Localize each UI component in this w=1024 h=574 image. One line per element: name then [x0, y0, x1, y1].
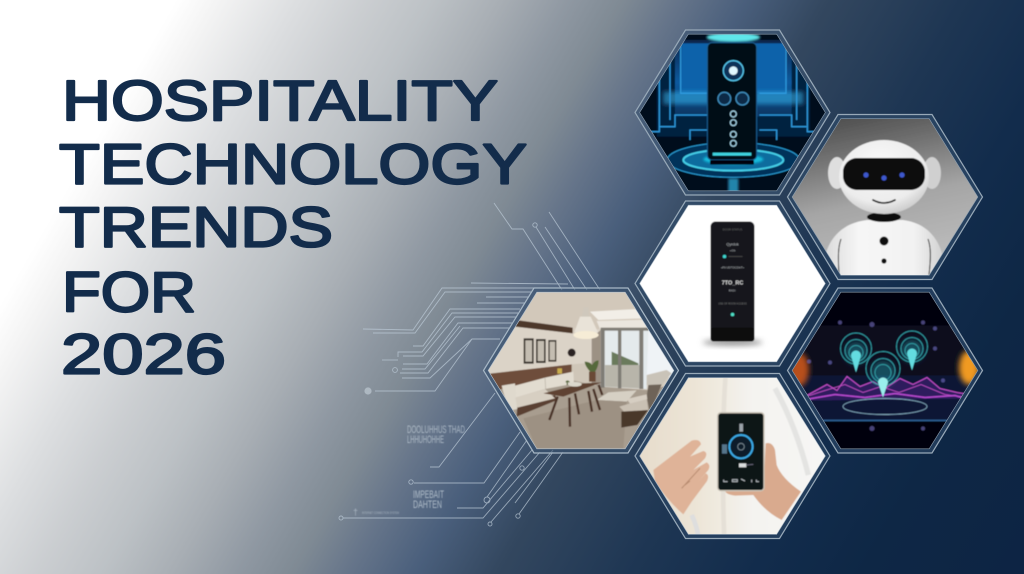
circuit node [364, 387, 372, 395]
title: TRENDS [59, 196, 333, 258]
panel: smart speaker hexagon [634, 29, 831, 196]
panel: hands holding phone hexagon [635, 374, 830, 540]
title: 2026 [61, 322, 226, 386]
title [59, 69, 527, 386]
title: HOSPITALITY [62, 69, 498, 132]
small caption with marker: † [353, 507, 358, 517]
small label: upper: LHHUHOHHE [407, 434, 444, 446]
small label: upper [407, 424, 465, 446]
panel: smartphone on white hexagon: 7TO_RC [722, 280, 743, 286]
panel: smartphone on white hexagon: DOOR STATUS [723, 228, 743, 232]
small label: lower: DAHTEN [413, 499, 442, 511]
panel: smartphone on white hexagon: Qyrdok [726, 242, 739, 246]
panel: robot hexagon [788, 114, 982, 280]
panel: smartphone on white hexagon [635, 201, 830, 366]
circuit lines [339, 203, 600, 526]
title: FOR [62, 260, 196, 324]
panel: smartphone on white hexagon: +Pli UDTOCDHT+ [721, 266, 745, 270]
panel: holographic wifi pins hexagon [788, 288, 982, 453]
small label: lower [413, 489, 444, 511]
panel: hotel room hexagon [480, 285, 680, 455]
small caption with marker [353, 507, 399, 517]
panel: smartphone on white hexagon: RADI: [729, 288, 736, 292]
panel: smartphone on white hexagon: USE OF ROOM ACCESS [718, 302, 747, 306]
small label: lower: IMPEBAIT [413, 489, 444, 501]
small caption with marker: INTERNET CONNECTION SYSTEM [362, 510, 399, 515]
panel: smartphone on white hexagon: +Ob [730, 248, 736, 252]
small label: upper: DOOLUHHUS THAD [407, 424, 465, 436]
title: TECHNOLOGY [59, 132, 527, 196]
